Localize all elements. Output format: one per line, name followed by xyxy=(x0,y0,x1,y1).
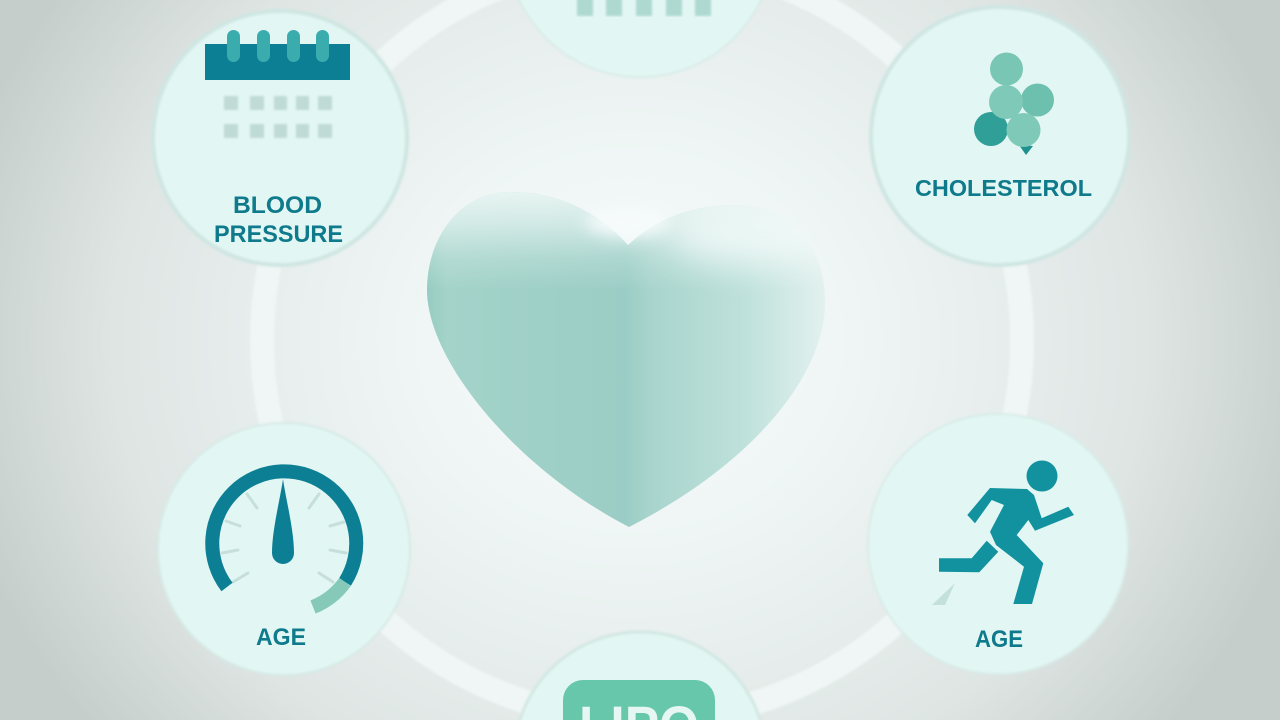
panel: age gauge xyxy=(158,423,410,675)
connecting ring xyxy=(262,0,1022,720)
panel: top circle (cropped) xyxy=(507,0,773,77)
icon: gauge xyxy=(212,471,356,607)
label: pressure: PRESSURE xyxy=(214,221,343,248)
panel: age runner xyxy=(868,414,1128,674)
icon: cholesterol cluster xyxy=(974,52,1054,155)
icon: calendar squares (cropped) xyxy=(577,0,711,16)
panel: cholesterol xyxy=(871,7,1129,265)
label: blood: BLOOD xyxy=(233,192,322,219)
icon: runner xyxy=(932,460,1074,605)
panel: lipo (cropped) xyxy=(514,632,766,720)
label: age: AGE xyxy=(256,624,306,651)
label: cholesterol: CHOLESTEROL xyxy=(915,175,1092,201)
heart xyxy=(427,192,825,527)
icon: calendar xyxy=(205,30,350,138)
label: age: AGE xyxy=(975,626,1023,653)
panel: blood pressure xyxy=(153,11,407,265)
icon: lipo badge xyxy=(563,680,715,720)
